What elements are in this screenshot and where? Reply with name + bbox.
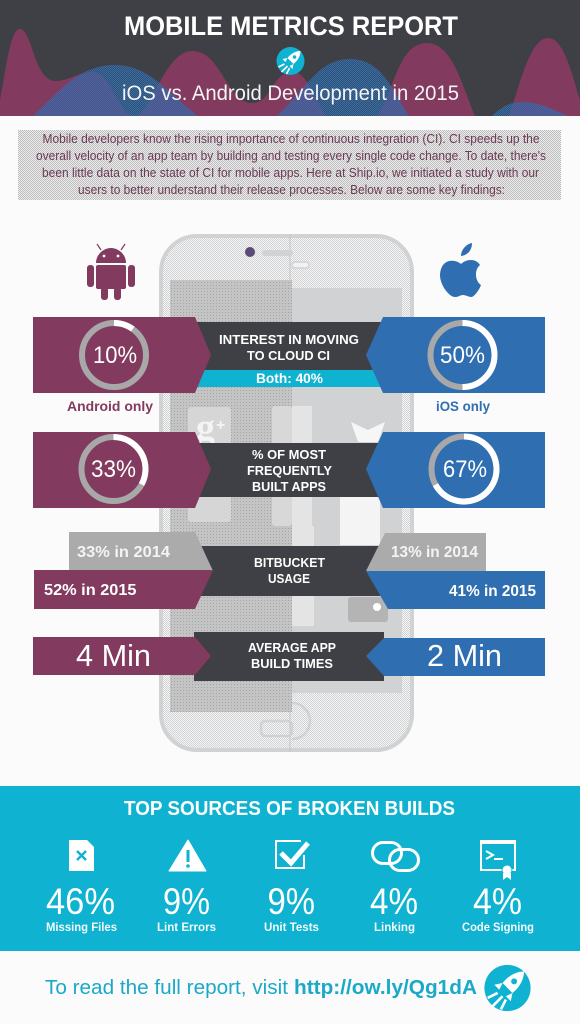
intro text block: been little data on the state of CI for mobile apps. Here at Ship.io, we initiated a study with our (42, 166, 539, 180)
stat: lint errors: 9% (163, 881, 210, 922)
app tile: center (272, 406, 312, 526)
app tile: chevron (351, 422, 385, 442)
center label (194, 632, 384, 681)
android 2014 bar: 33% in 2014 (77, 544, 170, 561)
ios arrow (366, 638, 545, 676)
ios 2015 bar: 41% in 2015 (449, 583, 536, 600)
panel: interest in moving to cloud CI (33, 317, 545, 393)
donut: ios 50%: 50% (440, 342, 485, 369)
android 2014 bar (69, 532, 213, 571)
panel: average app build times (33, 632, 545, 681)
intro text block: Mobile developers know the rising importance of continuous integration (CI). CI speeds up the (42, 132, 540, 146)
center heading: INTEREST IN MOVING (219, 332, 359, 347)
center heading: TO CLOUD CI (247, 348, 330, 363)
ios 2014 bar: 13% in 2014 (391, 544, 478, 561)
center label: BUILD TIMES (251, 656, 333, 671)
both bar (190, 370, 390, 387)
stat: code signing: Code Signing (462, 922, 534, 934)
intro text block: overall velocity of an app team by building and testing every single code change. To date, there's (36, 149, 546, 163)
ios arrow (366, 432, 545, 508)
center label: AVERAGE APP (248, 640, 336, 655)
donut: ios 67% (432, 436, 496, 502)
footer call to action: http://ow.ly/Qg1dA (294, 977, 477, 999)
stat: unit tests: Unit Tests (264, 922, 319, 934)
icon: rocket logo (276, 47, 304, 75)
donut: android 33% (82, 437, 146, 501)
center heading (219, 332, 359, 363)
header banner (0, 0, 580, 116)
icon: missing file (69, 840, 94, 871)
center label: USAGE (268, 571, 310, 586)
icon: chain link (372, 842, 418, 870)
title: MOBILE METRICS REPORT (124, 11, 458, 41)
stat: lint errors: Lint Errors (157, 922, 216, 934)
footer call to action: To read the full report, visit (45, 977, 288, 999)
android arrow (33, 637, 211, 675)
icon: code signing certificate (480, 840, 516, 880)
app tile: camera (348, 597, 388, 622)
android 2015 bar: 52% in 2015 (44, 582, 137, 599)
icon: apple logo (440, 243, 481, 297)
both bar: Both: 40% (256, 371, 323, 386)
donut: ios 67%: 67% (443, 456, 487, 483)
donut: android 10%: 10% (93, 342, 137, 369)
android arrow (33, 432, 211, 508)
app tile: g+: g (196, 407, 215, 449)
center label: BITBUCKET (254, 555, 325, 570)
donut: ios 50% (430, 323, 494, 387)
label: android only: Android only (67, 399, 153, 414)
icon: warning triangle (169, 840, 206, 871)
intro text block (18, 130, 561, 200)
icon: checkbox (276, 841, 308, 868)
donut: android 33%: 33% (91, 456, 136, 483)
phone speaker (262, 250, 293, 256)
ios arrow: 2 Min (427, 638, 502, 673)
panel: top sources of broken builds (0, 786, 580, 951)
center label (190, 322, 390, 370)
app tile: g+: + (216, 417, 225, 434)
stat: linking: Linking (374, 922, 415, 934)
label: ios only: iOS only (436, 399, 490, 414)
panel: bitbucket usage (34, 532, 545, 609)
subtitle: iOS vs. Android Development in 2015 (122, 82, 459, 105)
android 2015 bar (34, 570, 213, 609)
center label: BUILT APPS (252, 479, 326, 494)
panel: most frequently built apps (33, 432, 545, 508)
intro text block: users to better understand their release processes. Below are some key findings: (78, 183, 505, 197)
stat: lint errors (157, 881, 216, 934)
blue hills (33, 65, 198, 116)
ios 2015 bar (366, 571, 545, 609)
phone illustration (161, 234, 412, 752)
icon: android robot (87, 244, 135, 300)
stat: code signing: 4% (473, 881, 522, 922)
ios 2014 bar (366, 533, 486, 571)
android arrow: 4 Min (76, 638, 151, 673)
app tile: white column (292, 526, 314, 626)
footer call to action (45, 977, 477, 999)
stat: missing files: Missing Files (46, 922, 117, 934)
purple hills (0, 29, 475, 116)
donut: android 10% (82, 323, 146, 387)
app tile: g+ (188, 407, 231, 522)
phone camera (245, 247, 255, 257)
stat: code signing (462, 881, 534, 934)
section heading: TOP SOURCES OF BROKEN BUILDS (124, 798, 455, 820)
stat: unit tests: 9% (268, 881, 315, 922)
android arrow (33, 317, 211, 393)
app tile: list card (340, 497, 380, 545)
center label: % OF MOST (252, 447, 326, 462)
center label (195, 546, 385, 596)
center label: FREQUENTLY (247, 463, 332, 478)
phone home button (261, 703, 310, 739)
stat: linking: 4% (370, 881, 418, 922)
icon: rocket logo footer (484, 965, 531, 1011)
center label (190, 443, 390, 497)
ios arrow (366, 317, 545, 393)
stat: missing files: 46% (46, 881, 115, 922)
